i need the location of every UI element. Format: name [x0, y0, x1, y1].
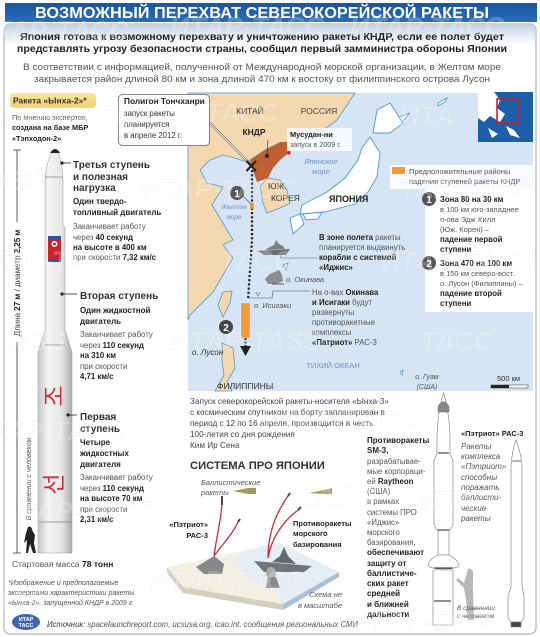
- rocket name badge: Ракета «Ынха-2»*: [13, 96, 87, 106]
- launch mass: Стартовая масса 78 тонн: [12, 559, 113, 569]
- zone 1 note: ступени: [440, 245, 471, 254]
- footnote: [8, 579, 135, 607]
- second stage text: на 310 км: [80, 351, 116, 360]
- human comparison: В сравнении с человеком: [26, 437, 33, 520]
- caption: human scale: В сравнении: [457, 605, 495, 612]
- korean letters: 조: [41, 385, 67, 407]
- interceptor trails: [214, 496, 298, 558]
- SM-3 rocket: [428, 393, 459, 625]
- SM-3 text: [367, 436, 429, 619]
- watermark: TAR-TASS: [400, 174, 532, 204]
- icon: Aegis ship on map: [258, 240, 318, 258]
- legend panel: [390, 165, 533, 312]
- SM-3 text: мые корпораци-: [367, 467, 426, 476]
- second stage text: [60, 291, 158, 381]
- Patriot text: способны: [461, 473, 497, 482]
- third stage text: через 40 секунд: [73, 233, 133, 242]
- text: Aegis ships: «Иджис»: [319, 263, 353, 272]
- watermark: ИТАР-ТАСС: [140, 174, 294, 204]
- label: KNDR: [242, 127, 269, 158]
- map country labels: море: [312, 167, 330, 176]
- SM-3 text: в рамках: [367, 497, 399, 506]
- callout: Tonghae range: планируется: [124, 120, 170, 129]
- zone 2 note: [422, 256, 524, 308]
- Patriot rocket: [508, 440, 524, 627]
- map country labels: Желтое: [220, 204, 247, 211]
- scale bar: 500 км: [497, 374, 520, 383]
- third stage text: топливный двигатель: [73, 208, 161, 217]
- map country labels: РОССИЯ: [301, 106, 337, 116]
- SM-3 text: ских ракет: [367, 579, 409, 588]
- second stage text: двигатель: [80, 317, 121, 326]
- SM-3 text: морского: [367, 528, 400, 537]
- land: South Korea: [260, 178, 290, 213]
- map: [188, 93, 533, 391]
- zone 1 note: [422, 192, 519, 254]
- SM-3 text: дальности: [367, 610, 410, 619]
- watermark: ТАР-ТАСС: [0, 101, 135, 131]
- watermark: ТАР-ТАСС: [20, 496, 155, 526]
- subtitle: Япония готова к возможному перехвату и уничтожению ракеты КНДР, если ее полет будет: [20, 31, 504, 43]
- map country labels: КИТАЙ: [236, 105, 264, 116]
- map country labels: [192, 105, 439, 391]
- first stage text: на высоте 70 км: [80, 494, 143, 503]
- text: Patriot on islands: развернуты: [312, 308, 355, 317]
- SM-3 text: обеспечивают: [367, 548, 424, 557]
- rocket dimension line: Длина 27 м / диаметр 2,25 м: [13, 230, 22, 336]
- watermark: ASS: [9, 326, 66, 356]
- map country labels: (США): [417, 384, 437, 391]
- first stage text: Четыре: [80, 438, 111, 447]
- missile defense diagram: [167, 488, 339, 610]
- SM-3 text: SM-3,: [367, 446, 388, 455]
- label: Musudan-ri: Мусудан-ни: [290, 130, 333, 139]
- footnote: экспертами характеристики ракеты: [8, 590, 135, 597]
- header gradient: [5, 25, 535, 45]
- rocket description: создана на базе МБР: [12, 123, 88, 132]
- intro text: закрывается район длиной 80 км и зона длиной 470 км к востоку от филиппинского острова Лусон: [34, 74, 490, 84]
- second stage text: Один жидкостной: [80, 306, 151, 315]
- caption: human scale: [457, 605, 495, 620]
- caption: human scale: с человеком: [457, 613, 495, 620]
- diagram labels: Схема не: [309, 590, 342, 599]
- callout: Tonghae range: запуск ракеты: [124, 109, 175, 118]
- flag: [48, 236, 61, 262]
- footnote: *Изображение и предполагаемые: [8, 579, 119, 587]
- diagram labels: «Пэтриот»: [169, 520, 208, 529]
- label: KNDR: КНДР: [242, 127, 266, 137]
- map country labels: ФИЛИППИНЫ: [217, 381, 273, 391]
- SM-3 text: защиту от: [367, 559, 406, 568]
- third stage text: и полезная: [73, 172, 128, 183]
- first stage text: через 110 секунд: [80, 484, 144, 493]
- inset locator map: [478, 92, 533, 142]
- SM-3 text: ей Raytheon: [367, 477, 414, 486]
- watermark: ТАСС: [205, 98, 278, 128]
- human silhouette: SM-3 scale: [456, 569, 474, 620]
- SM-3 text: «Иджис»: [367, 518, 400, 527]
- second stage text: Заканчивает работу: [80, 330, 153, 339]
- first stage text: Первая: [80, 412, 116, 423]
- map country labels: о. Лусон: [192, 348, 224, 357]
- diagram labels: морского: [293, 529, 328, 538]
- text: Patriot on islands: противоракетные: [312, 318, 375, 327]
- zone 2 note: ступени: [440, 299, 471, 308]
- human comparison: [24, 437, 36, 553]
- SM-3 text: баллистиче-: [367, 569, 417, 578]
- diagram labels: [169, 478, 351, 610]
- Patriot text: Ракеты: [461, 442, 492, 451]
- zone 2 note: в 150 км северо-вост.: [440, 269, 515, 278]
- zone 1 note: (Юж. Корея) –: [440, 225, 490, 234]
- label: Musudan-ri: запуск в 2009 г.: [290, 140, 341, 149]
- diagram labels: Баллистические: [201, 478, 260, 487]
- subtitle: [17, 31, 507, 55]
- marker 1 on map: 1: [234, 189, 240, 200]
- land: North Korea: [250, 142, 290, 182]
- source: Источник: spacelaunchreport.com, ucsusa.org, icao.int, сообщения региональных СМИ: [47, 620, 358, 629]
- diagram labels: базирования: [293, 540, 342, 549]
- rocket description: «Тэпходон-2»: [12, 134, 61, 143]
- second stage text: при скорости: [80, 362, 127, 371]
- watermark: ИТАР-TASS: [170, 326, 321, 356]
- Patriot text: [460, 429, 523, 523]
- watermark: ИТА: [420, 486, 474, 516]
- first stage text: двигателя: [80, 460, 121, 469]
- first stage text: [66, 412, 153, 524]
- third stage text: [60, 160, 161, 262]
- text: Patriot on islands: «Патриот» РАС-3: [312, 338, 377, 347]
- footnote: «Ынха-2», запущенной КНДР в 2009 г.: [8, 599, 134, 607]
- text: Patriot on islands: комплексы: [312, 328, 352, 337]
- SM-3 text: разрабатывае-: [367, 457, 421, 466]
- drop zone 1: [250, 204, 254, 209]
- Patriot text: баллисти-: [461, 493, 501, 502]
- text: Patriot on islands: и Исигаки будут: [312, 298, 373, 307]
- text: Patriot on islands: [248, 288, 379, 347]
- rocket description: [12, 113, 88, 143]
- launch text: Ким Ир Сена: [190, 441, 240, 450]
- third stage text: на высоте в 400 км: [73, 243, 147, 252]
- first stage text: при скорости: [80, 505, 127, 514]
- icon: radar on Okinawa: [265, 270, 284, 284]
- SM-3 text: средней: [367, 589, 400, 598]
- watermark: ИТАР-ТАСС: [380, 246, 534, 276]
- land: China and Russia: [188, 93, 355, 320]
- zone 2 note: о. Лусон (Филиппины) –: [440, 279, 524, 288]
- ship icon: [254, 561, 312, 572]
- map country labels: ЯПОНИЯ: [329, 194, 368, 204]
- third stage text: нагрузка: [73, 183, 116, 194]
- second stage text: 4,71 км/с: [80, 372, 114, 381]
- watermark: ИТАР-TASS: [350, 606, 501, 636]
- second stage text: через 110 секунд: [80, 341, 144, 350]
- map country labels: о. Окинава: [286, 275, 324, 284]
- callout: Tonghae range: в апреле 2012 г.: [124, 131, 182, 140]
- first stage text: ступень: [80, 424, 120, 435]
- map country labels: КОРЕЯ: [271, 193, 300, 203]
- map country labels: ТИХИЙ ОКЕАН: [306, 361, 360, 370]
- scale bar: [491, 374, 528, 388]
- map country labels: море: [226, 214, 242, 221]
- SM-3 text: системы ПРО: [367, 508, 417, 517]
- zone 1 note: п-ова Эдж Хилл: [440, 215, 495, 224]
- watermark: ТАСС: [300, 481, 373, 511]
- text: Patriot on islands: На о-вах Окинава: [312, 288, 379, 297]
- map country labels: ЮЖ.: [268, 181, 287, 191]
- land: Japan: [290, 103, 403, 234]
- zone 1 note: 1: [426, 195, 432, 206]
- launch text: 100-летия со дня рождения: [190, 430, 295, 439]
- watermark: ТАСС: [420, 326, 493, 356]
- text: Aegis ships: [319, 233, 405, 272]
- launch text: Запуск северокорейской ракеты-носителя «Ынха-3»: [190, 397, 389, 406]
- drop zone 2: [241, 303, 250, 338]
- text: Aegis ships: планируется выдвинуть: [319, 243, 405, 252]
- trajectory arrow: [240, 161, 256, 356]
- zone 1 note: падение первой: [440, 235, 503, 244]
- label: Musudan-ri: [287, 128, 352, 155]
- launch text: [190, 397, 389, 450]
- map country labels: о. Гуам: [415, 374, 439, 381]
- diagram labels: в масштабе: [298, 601, 342, 610]
- watermark: ИТАР-ТАСС: [150, 566, 304, 596]
- text: Aegis ships: В зоне полета ракеты: [319, 233, 401, 242]
- land: islands: [215, 291, 235, 391]
- legend panel: Предположительные районы: [409, 167, 510, 176]
- Patriot text: «Пэтриот»: [461, 462, 507, 471]
- rocket dimension line: [13, 150, 22, 553]
- subtitle: представлять угрозу безопасности страны, сообщил первый замминистра обороны Японии: [17, 43, 507, 55]
- Patriot text: комплекса: [461, 452, 501, 461]
- logo: ИТАР: [19, 617, 34, 623]
- intro text: В соответствии с информацией, полученной от Международной морской организации, в Желтом море: [23, 62, 501, 72]
- SM-3 text: Противоракеты: [367, 436, 429, 445]
- diagram labels: РАС-3: [186, 531, 208, 540]
- callout: Tonghae range: [118, 94, 251, 165]
- watermark: ИТА: [400, 101, 454, 131]
- zone 2 note: Зона 470 на 100 км: [440, 259, 512, 268]
- rocket description: По мнению экспертов,: [12, 113, 88, 122]
- launch text: с космическим спутником на борту запланирован в: [190, 408, 385, 417]
- launcher icon: [196, 556, 224, 574]
- SM-3 text: и ближней: [367, 600, 409, 609]
- diagram labels: Противоракеты: [293, 519, 351, 528]
- Patriot text: «Пэтриот» РАС-3: [461, 429, 523, 438]
- zone 1 note: в 100 км юго-западнее: [440, 205, 519, 214]
- SM-3 text: базирования,: [367, 538, 416, 547]
- first stage text: Заканчивает работу: [80, 473, 153, 482]
- third stage text: Третья ступень: [73, 160, 150, 171]
- marker 2 on map: 2: [223, 323, 229, 334]
- zone 1 note: Зона 80 на 30 км: [440, 195, 504, 204]
- watermark: ТАСС: [220, 246, 293, 276]
- ballistic missile icons: [233, 488, 256, 494]
- first stage text: жидкостных: [79, 449, 129, 458]
- watermark: ИТАР-ТАСС: [170, 12, 324, 42]
- rocket Unha-2: [38, 149, 72, 553]
- diagram labels: ракеты: [200, 488, 229, 497]
- terrain slab: [167, 543, 339, 604]
- title: ВОЗМОЖНЫЙ ПЕРЕХВАТ СЕВЕРОКОРЕЙСКОЙ РАКЕТЫ: [35, 4, 489, 22]
- map country labels: Японское: [303, 157, 338, 166]
- rocket name badge: [10, 93, 96, 108]
- map country labels: о. Исигаки: [254, 301, 292, 310]
- logo: [12, 614, 40, 630]
- text: Aegis ships: корабли с системой: [319, 253, 397, 262]
- logo: ТАСС: [19, 623, 33, 629]
- third stage text: Заканчивает работу: [73, 222, 146, 231]
- legend panel: падения ступеней ракеты КНДР: [409, 177, 521, 186]
- heading: Japan missile defense: СИСТЕМА ПРО ЯПОНИИ: [190, 460, 325, 472]
- zone 2 note: падение второй: [440, 289, 502, 298]
- radar icon: [266, 567, 276, 579]
- Patriot text: ракеты: [460, 514, 491, 523]
- marker 1 on map: [230, 186, 251, 204]
- second stage text: Вторая ступень: [80, 291, 158, 302]
- third stage text: Один твердо-: [73, 197, 127, 206]
- watermark: ИТАР-ТАСС: [350, 12, 504, 42]
- Patriot text: ческие: [461, 504, 487, 513]
- callout: Tonghae range: Полигон Тончханри: [124, 96, 205, 106]
- intro text: [23, 62, 501, 84]
- rocket Unha-2: 선: [41, 473, 67, 495]
- marker 2 on map: [219, 320, 233, 334]
- launch text: период с 12 по 16 апреля, производится в честь: [190, 419, 373, 428]
- SM-3 text: (США): [367, 487, 391, 496]
- first stage text: 2,31 км/с: [80, 515, 114, 524]
- watermark: ИТАР-ТАСС: [260, 406, 414, 436]
- third stage text: при скорости 7,32 км/с: [73, 253, 157, 262]
- Patriot text: поражать: [461, 483, 500, 492]
- zone 2 note: 2: [426, 259, 432, 270]
